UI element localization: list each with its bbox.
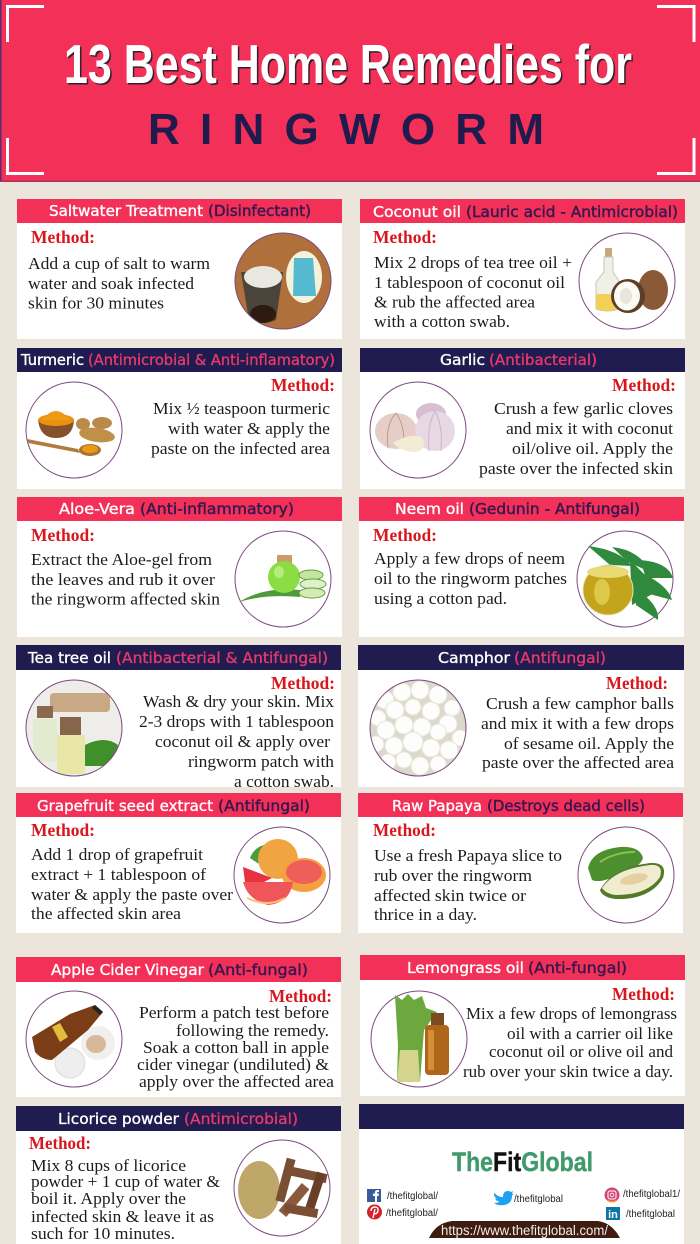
heading: Apple Cider Vinegar bbox=[16, 957, 341, 982]
subtitle: RINGWORM bbox=[148, 105, 544, 154]
method text: Add a cup of salt to warm bbox=[28, 254, 210, 273]
heading: Licorice powder: (Antimicrobial) bbox=[184, 1110, 298, 1128]
heading: Licorice powder bbox=[16, 1106, 341, 1131]
website url: https://www.thefitglobal.com/ bbox=[441, 1223, 608, 1238]
method text: water & apply the paste over bbox=[31, 885, 233, 904]
method text: Soak a cotton ball in apple bbox=[143, 1038, 329, 1057]
icon: grapefruit bbox=[234, 827, 330, 923]
heading: Tea tree oil: (Antibacterial & Antifungal) bbox=[116, 649, 328, 667]
method text bbox=[137, 1003, 334, 1091]
method label: Method: bbox=[31, 525, 95, 545]
heading: Lemongrass oil bbox=[360, 955, 685, 980]
method text: paste on the infected area bbox=[151, 439, 330, 458]
method label: Method: bbox=[31, 227, 95, 247]
method text: paste over the infected skin bbox=[479, 459, 674, 478]
method text: Wash & dry your skin. Mix bbox=[143, 692, 335, 711]
method label: Method: bbox=[271, 673, 335, 693]
panel: Aloe-Vera bbox=[17, 497, 342, 637]
panel: Apple Cider Vinegar bbox=[16, 957, 341, 1097]
heading: Camphor: Camphor bbox=[438, 649, 511, 667]
method text: Crush a few camphor balls bbox=[486, 694, 674, 713]
heading: Aloe-Vera: Aloe-Vera bbox=[59, 500, 135, 518]
panel: Saltwater Treatment bbox=[17, 199, 342, 339]
method label: Method: bbox=[29, 1133, 91, 1153]
method text bbox=[139, 692, 335, 791]
icon: facebook bbox=[367, 1189, 381, 1202]
method text: ringworm patch with bbox=[188, 752, 335, 771]
heading: Grapefruit seed extract bbox=[16, 793, 341, 817]
heading: Raw Papaya: (Destroys dead cells) bbox=[487, 797, 645, 815]
method text: following the remedy. bbox=[176, 1021, 329, 1040]
icon: tea tree oil bottles bbox=[26, 680, 122, 776]
heading: Aloe-Vera: (Anti-inflammatory) bbox=[140, 500, 294, 518]
icon: camphor balls bbox=[368, 680, 468, 776]
method text: coconut oil & apply over bbox=[155, 732, 330, 751]
logo: TheFitGlobal bbox=[452, 1147, 593, 1177]
method text: infected skin & leave it as bbox=[31, 1207, 214, 1226]
method label: Method: bbox=[606, 673, 668, 693]
panel: Neem oil bbox=[359, 497, 684, 637]
title banner bbox=[0, 0, 700, 182]
icon: twitter bbox=[494, 1191, 514, 1205]
method text: Apply a few drops of neem bbox=[374, 549, 565, 568]
method text: Crush a few garlic cloves bbox=[494, 399, 673, 418]
heading: Garlic: Garlic bbox=[440, 351, 485, 369]
method text bbox=[31, 550, 221, 608]
method text: Mix ½ teaspoon turmeric bbox=[153, 399, 330, 418]
panel: Tea tree oil bbox=[16, 645, 341, 791]
heading: Neem oil: Neem oil bbox=[395, 500, 464, 518]
method label: Method: bbox=[271, 375, 335, 395]
panel: Raw Papaya bbox=[358, 793, 683, 933]
method label: Method: bbox=[612, 984, 675, 1004]
heading: Garlic bbox=[360, 348, 685, 372]
heading: Coconut oil bbox=[360, 199, 685, 223]
method text: Mix 2 drops of tea tree oil + bbox=[374, 253, 572, 272]
method text: thrice in a day. bbox=[374, 905, 477, 924]
method text: with water & apply the bbox=[168, 419, 330, 438]
icon: apple cider vinegar bottle bbox=[26, 991, 122, 1087]
method text: Add 1 drop of grapefruit bbox=[31, 845, 203, 864]
heading: Camphor bbox=[358, 645, 684, 670]
method text: oil to the ringworm patches bbox=[374, 569, 567, 588]
heading: Tea tree oil: Tea tree oil bbox=[27, 649, 111, 667]
method text: the ringworm affected skin bbox=[31, 590, 221, 608]
icon: papaya bbox=[578, 827, 674, 923]
heading: Raw Papaya bbox=[358, 793, 683, 817]
heading: Lemongrass oil: (Anti-fungal) bbox=[528, 959, 627, 977]
icon: instagram bbox=[604, 1188, 620, 1203]
method text: Mix a few drops of lemongrass bbox=[466, 1004, 677, 1023]
method text: using a cotton pad. bbox=[374, 589, 507, 608]
method text: 1 tablespoon of coconut oil bbox=[374, 273, 565, 292]
heading: Coconut oil: Coconut oil bbox=[373, 203, 461, 221]
method label: Method: bbox=[373, 820, 436, 840]
heading: Lemongrass oil: Lemongrass oil bbox=[407, 959, 524, 977]
method text: & rub the affected area bbox=[374, 292, 535, 312]
panel: TheFitGlobal branding bbox=[359, 1104, 684, 1244]
heading: Turmeric bbox=[17, 348, 342, 372]
heading: Raw Papaya: Raw Papaya bbox=[392, 797, 482, 815]
heading: Garlic: (Antibacterial) bbox=[489, 351, 597, 369]
heading: Grapefruit seed extract: Grapefruit seed extract bbox=[37, 797, 213, 815]
panel: Camphor bbox=[358, 645, 684, 787]
heading: Licorice powder: Licorice powder bbox=[58, 1110, 180, 1128]
method text: Extract the Aloe-gel from bbox=[31, 550, 212, 569]
method text: and mix it with a few drops bbox=[481, 714, 674, 733]
method text: skin for 30 minutes bbox=[28, 294, 164, 312]
method text bbox=[31, 1156, 220, 1243]
method text: of sesame oil. Apply the bbox=[504, 734, 674, 753]
method text: boil it. Apply over the bbox=[31, 1189, 186, 1208]
method label: Method: bbox=[31, 820, 95, 840]
panel: Garlic bbox=[360, 348, 685, 489]
icon: turmeric powder and root bbox=[26, 382, 122, 478]
method text: the leaves and rub it over bbox=[31, 570, 215, 589]
icon: aloe vera gel flask bbox=[235, 531, 331, 627]
method text bbox=[374, 549, 567, 608]
panel: Licorice powder bbox=[16, 1106, 341, 1244]
heading: Saltwater Treatment bbox=[17, 199, 342, 223]
instagram handle: /thefitglobal1/ bbox=[623, 1189, 680, 1200]
heading: Neem oil bbox=[359, 497, 684, 521]
panel: Grapefruit seed extract bbox=[16, 793, 341, 933]
facebook handle: /thefitglobal/ bbox=[387, 1191, 438, 1202]
method text: paste over the affected area bbox=[482, 753, 674, 772]
method text: a cotton swab. bbox=[234, 772, 334, 791]
heading: Camphor: (Antifungal) bbox=[514, 649, 606, 667]
icon: pinterest bbox=[367, 1204, 382, 1220]
icon: linkedin: in bbox=[608, 1209, 618, 1221]
method text: apply over the affected area bbox=[139, 1072, 334, 1091]
method text: Perform a patch test before bbox=[139, 1003, 329, 1022]
method text bbox=[28, 254, 210, 312]
method text: such for 10 minutes. bbox=[31, 1224, 175, 1243]
method text: extract + 1 tablespoon of bbox=[31, 865, 206, 884]
method text: the affected skin area bbox=[31, 904, 181, 923]
method text: and mix it with coconut bbox=[506, 419, 673, 438]
icon: salt in glass and water pack bbox=[235, 233, 331, 329]
heading: Grapefruit seed extract: (Antifungal) bbox=[218, 797, 310, 815]
method text: oil with a carrier oil like bbox=[507, 1024, 673, 1043]
heading: Tea tree oil bbox=[16, 645, 341, 670]
method text: Use a fresh Papaya slice to bbox=[374, 846, 562, 865]
method text: oil/olive oil. Apply the bbox=[512, 439, 673, 458]
icon: lemongrass and oil bottle bbox=[371, 991, 467, 1087]
method text: coconut oil or olive oil and bbox=[489, 1042, 673, 1061]
heading: Turmeric: Turmeric bbox=[20, 351, 84, 369]
method text bbox=[151, 399, 330, 458]
icon: garlic bulbs bbox=[370, 382, 466, 478]
panel: Lemongrass oil bbox=[360, 955, 685, 1096]
method text: with a cotton swab. bbox=[374, 312, 510, 331]
icon: linkedin bbox=[606, 1207, 620, 1221]
method label: Method: bbox=[373, 227, 437, 247]
heading: Saltwater Treatment: Saltwater Treatment bbox=[49, 202, 203, 220]
pinterest handle: /thefitglobal/ bbox=[386, 1208, 438, 1219]
heading: Neem oil: (Gedunin - Antifungal) bbox=[469, 500, 640, 518]
method text: affected skin twice or bbox=[374, 886, 526, 905]
icon: licorice powder and sticks bbox=[234, 1140, 330, 1236]
method text bbox=[463, 1004, 677, 1081]
method text bbox=[31, 845, 233, 923]
method text bbox=[374, 253, 572, 331]
heading: Apple Cider Vinegar: (Anti-fungal) bbox=[208, 961, 308, 979]
method text bbox=[481, 694, 674, 772]
method text bbox=[374, 846, 562, 924]
icon: neem leaves and oil jar bbox=[577, 531, 673, 627]
method label: Method: bbox=[612, 375, 676, 395]
method text: rub over your skin twice a day. bbox=[463, 1062, 673, 1081]
icon: coconut and oil bottle bbox=[579, 233, 675, 329]
heading: Saltwater Treatment: (Disinfectant) bbox=[208, 202, 311, 220]
panel: Coconut oil bbox=[360, 199, 685, 339]
heading: Apple Cider Vinegar: Apple Cider Vinegar bbox=[51, 961, 205, 979]
method text: 2-3 drops with 1 tablespoon bbox=[139, 712, 334, 731]
method text: rub over the ringworm bbox=[374, 866, 532, 885]
panel: Turmeric bbox=[17, 348, 342, 489]
linkedin handle: /thefitglobal bbox=[626, 1209, 675, 1220]
heading: Aloe-Vera bbox=[17, 497, 342, 521]
method text bbox=[479, 399, 674, 478]
method text: water and soak infected bbox=[28, 274, 195, 293]
method label: Method: bbox=[269, 986, 332, 1006]
method text: Mix 8 cups of licorice bbox=[31, 1156, 186, 1175]
method label: Method: bbox=[373, 525, 437, 545]
method text: powder + 1 cup of water & bbox=[31, 1172, 220, 1191]
twitter handle: /thefitglobal bbox=[514, 1194, 563, 1205]
heading: Coconut oil: (Lauric acid - Antimicrobial) bbox=[466, 203, 678, 221]
method text: cider vinegar (undiluted) & bbox=[137, 1055, 329, 1074]
heading: Turmeric: (Antimicrobial & Anti-inflamatory) bbox=[88, 351, 335, 369]
